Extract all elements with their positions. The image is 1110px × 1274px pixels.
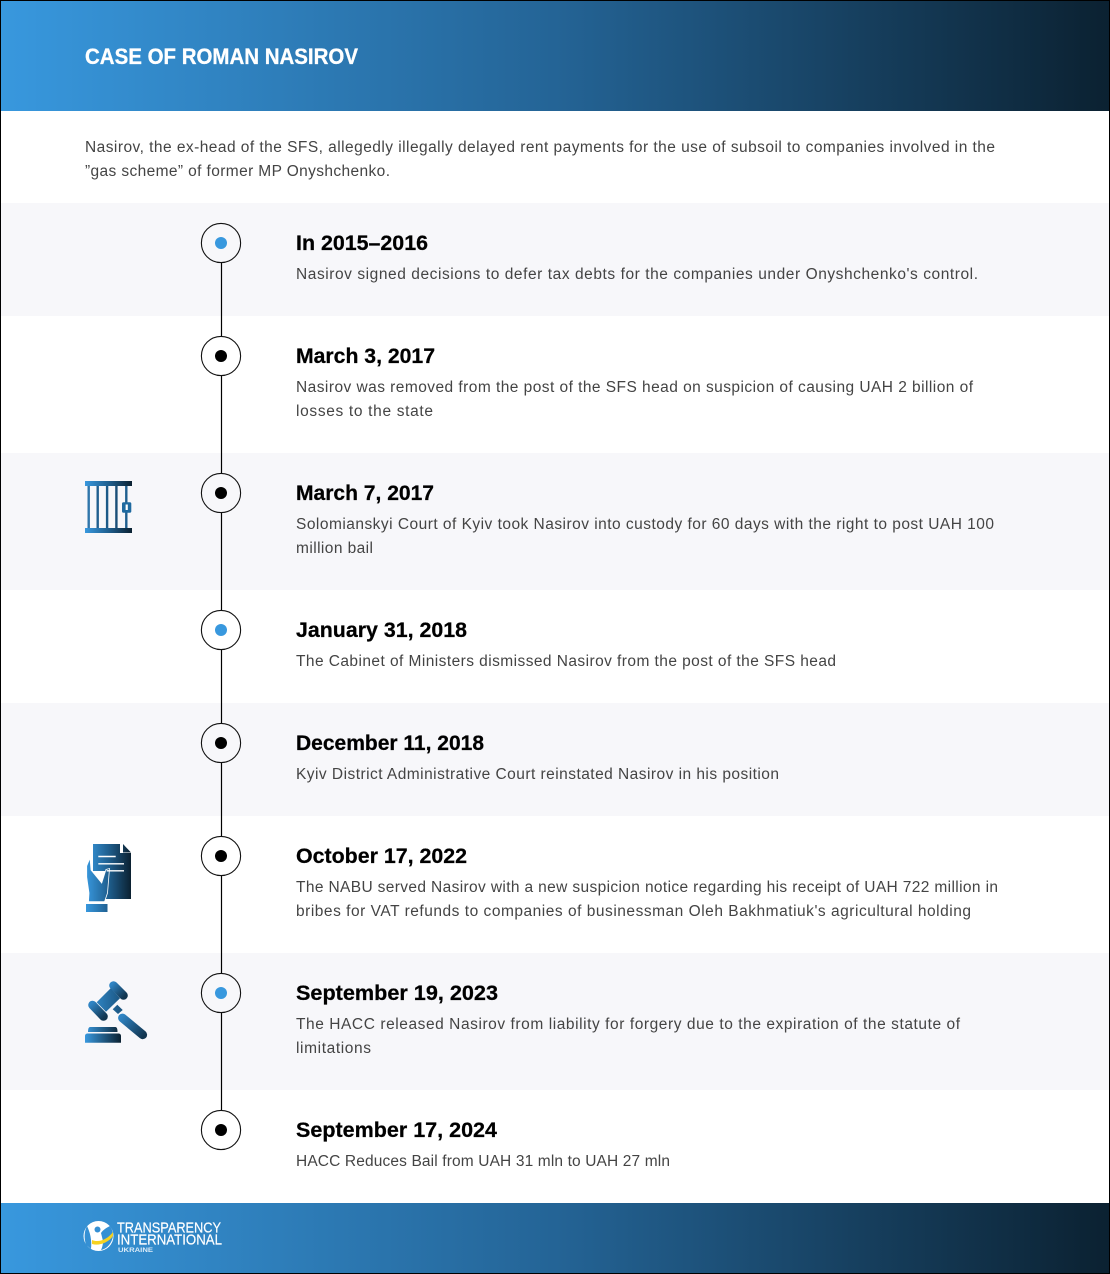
event: In 2015–2016: Nasirov signed decisions to defer tax debts for the companies under Onyshchenko's control. — [296, 266, 978, 283]
event: December 11, 2018 — [296, 731, 779, 783]
event: September 17, 2024: September 17, 2024 — [296, 1118, 497, 1142]
row background: March 7, 2017 — [1, 453, 1109, 590]
event: December 11, 2018: Kyiv District Administrative Court reinstated Nasirov in his position — [296, 766, 779, 783]
intro text: ”gas scheme” of former MP Onyshchenko. — [85, 163, 390, 180]
event: March 3, 2017: losses to the state — [296, 403, 433, 420]
event: September 19, 2023 — [296, 981, 961, 1057]
icon: gavel — [85, 986, 143, 1043]
logo: Transparency International Ukraine — [84, 1220, 222, 1254]
event: September 19, 2023: The HACC released Nasirov from liability for forgery due to the expiration of the statute of — [296, 1016, 961, 1033]
event: March 7, 2017 — [296, 481, 994, 557]
event: October 17, 2022: bribes for VAT refunds to companies of businessman Oleh Bakhmatiuk's agricultural holding — [296, 903, 971, 920]
event: In 2015–2016: In 2015–2016 — [296, 231, 428, 255]
header banner — [1, 1, 1109, 111]
event: October 17, 2022: The NABU served Nasirov with a new suspicion notice regarding his receipt of UAH 722 million in — [296, 879, 998, 896]
row background: December 11, 2018 — [1, 703, 1109, 816]
event: October 17, 2022 — [296, 844, 998, 920]
timeline marker 3 — [201, 473, 241, 513]
row background: 2015-2016 — [1, 203, 1109, 316]
intro text: Nasirov, the ex-head of the SFS, allegedly illegally delayed rent payments for the use of subsoil to companies involved in the — [85, 139, 995, 156]
event: September 19, 2023: limitations — [296, 1040, 371, 1057]
event: In 2015–2016 — [296, 231, 978, 283]
event: March 3, 2017 — [296, 344, 974, 420]
event: March 7, 2017: Solomianskyi Court of Kyiv took Nasirov into custody for 60 days with the right to post UAH 100 — [296, 516, 994, 533]
logo: Transparency International Ukraine: INTERNATIONAL — [117, 1232, 222, 1248]
event: March 3, 2017: March 3, 2017 — [296, 344, 435, 368]
footer banner — [1, 1203, 1109, 1273]
icon: jail cell — [85, 481, 132, 533]
event: September 17, 2024 — [296, 1118, 670, 1170]
timeline marker 6 — [201, 836, 241, 876]
event: December 11, 2018: December 11, 2018 — [296, 731, 484, 755]
logo: Transparency International Ukraine: UKRAINE — [118, 1247, 154, 1254]
timeline line — [220, 243, 222, 1130]
event: January 31, 2018: January 31, 2018 — [296, 618, 467, 642]
timeline marker 8 — [201, 1110, 241, 1150]
timeline marker 1 — [201, 223, 241, 263]
event: January 31, 2018: The Cabinet of Ministers dismissed Nasirov from the post of the SFS head — [296, 653, 836, 670]
event: January 31, 2018 — [296, 618, 836, 670]
event: March 3, 2017: Nasirov was removed from the post of the SFS head on suspicion of causing UAH 2 billion of — [296, 379, 974, 396]
timeline marker 7 — [201, 973, 241, 1013]
row background: September 19, 2023 — [1, 953, 1109, 1090]
icon: hand holding document — [86, 844, 131, 912]
timeline marker 5 — [201, 723, 241, 763]
event: September 17, 2024: HACC Reduces Bail from UAH 31 mln to UAH 27 mln — [296, 1153, 670, 1170]
event: March 7, 2017: million bail — [296, 540, 373, 557]
title: CASE OF ROMAN NASIROV — [85, 44, 358, 69]
logo: Transparency International Ukraine: TRANSPARENCY — [117, 1220, 221, 1236]
event: October 17, 2022: October 17, 2022 — [296, 844, 467, 868]
logo emblem — [84, 1221, 114, 1251]
event: September 19, 2023: September 19, 2023 — [296, 981, 498, 1005]
intro text — [85, 139, 995, 180]
timeline marker 2 — [201, 336, 241, 376]
event: March 7, 2017: March 7, 2017 — [296, 481, 434, 505]
timeline marker 4 — [201, 610, 241, 650]
